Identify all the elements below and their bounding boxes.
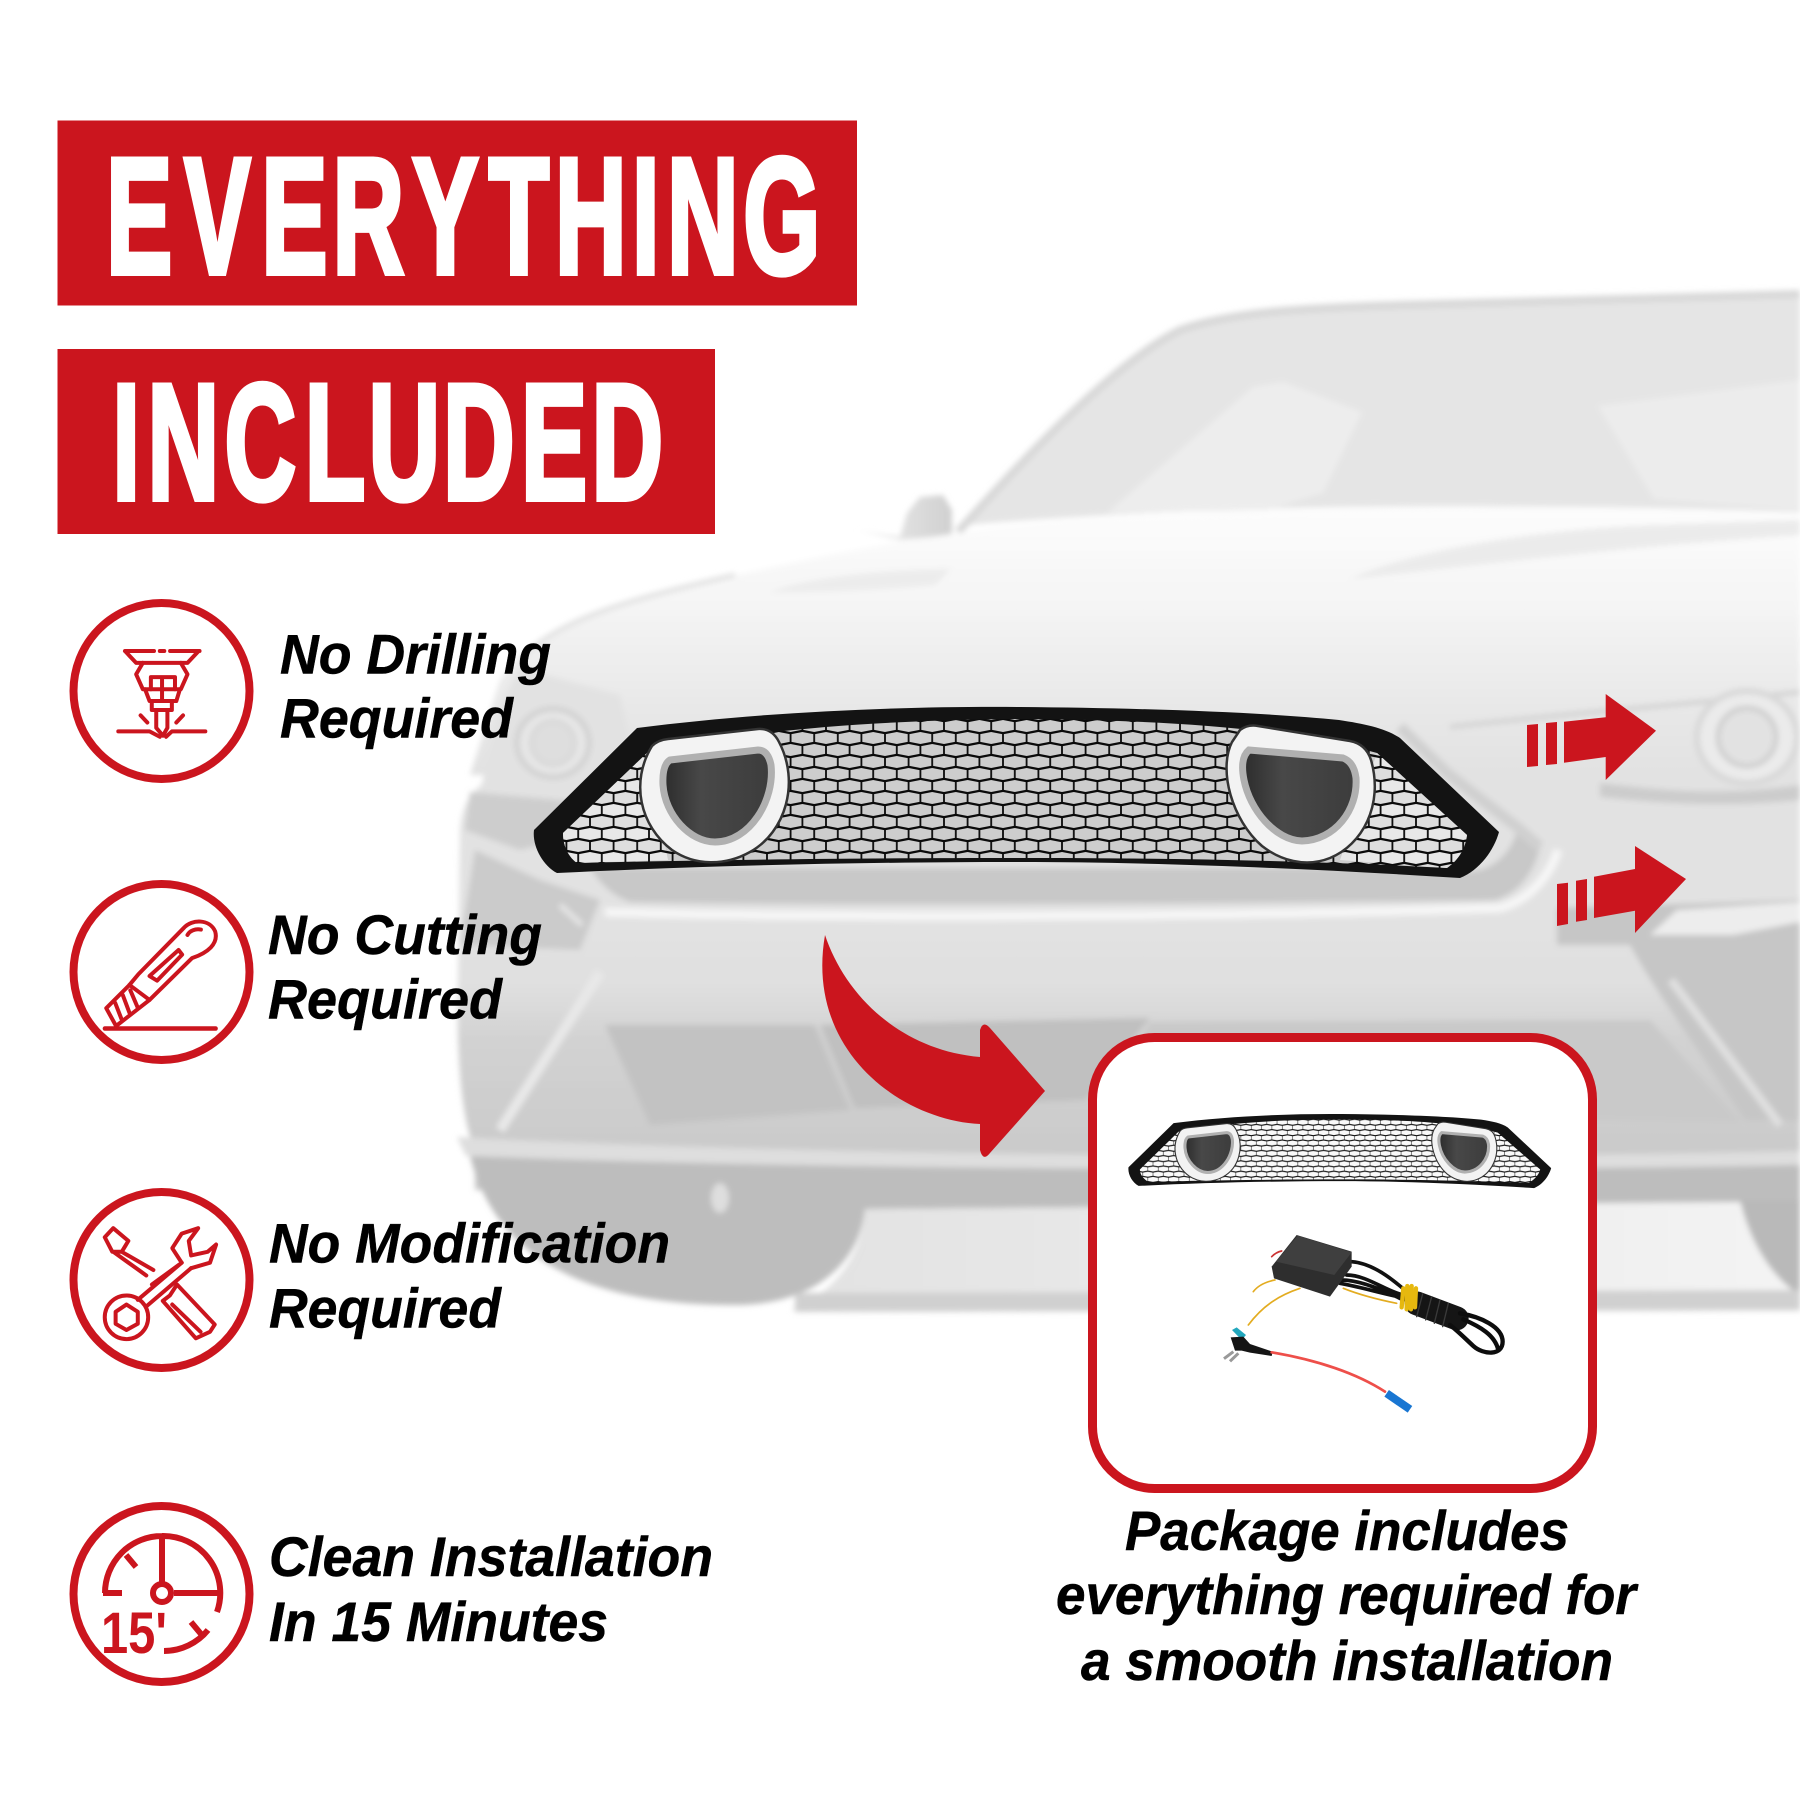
icon ring: tools [74,1192,250,1368]
hood [470,507,1800,775]
label: no cutting: No Cutting [268,903,542,966]
under-car floor [790,1202,1800,1312]
arrow: lower right [1557,846,1686,933]
icon: fifteen minute timer [101,1536,220,1666]
heading banner: INCLUDED: INCLUDED [112,350,663,534]
feature: no drilling [74,603,551,779]
panel: package contents [1092,1038,1592,1488]
background car photo [457,294,1800,1312]
icon ring: drilling [74,603,250,779]
lower valance and left wheel [470,1156,1800,1305]
package caption: everything required for [1056,1563,1639,1626]
lower intakes [605,1025,850,1125]
label: no modification: No Modification [269,1212,670,1274]
grille surround [590,830,1540,904]
curved arrow to package box [822,935,1045,1157]
icon ring: timer [74,1506,250,1682]
feature: no cutting [74,884,542,1060]
feature: no modification [74,1192,670,1368]
icon: wrench and screwdriver [105,1228,216,1339]
lower body [458,770,1800,1190]
wing mirror [856,495,952,540]
label: no drilling: Required [280,686,515,750]
icon ring: cutting [74,884,250,1060]
arrow: top right [1527,694,1656,780]
small grille product [1128,1114,1551,1188]
icon: drill [118,651,205,737]
windshield [965,295,1800,525]
label: no drilling: No Drilling [280,622,551,686]
icon: utility knife [105,922,216,1029]
heading banner: EVERYTHING: EVERYTHING [106,124,820,308]
icon: fifteen minute timer: 15' [101,1601,167,1666]
label: clean installation: Clean Installation [269,1525,713,1588]
package caption: Package includes [1125,1499,1569,1562]
bumper lip [457,1137,1800,1170]
wiring harness product [1224,1235,1503,1409]
right headlight [1450,692,1800,727]
package caption: a smooth installation [1081,1629,1613,1692]
main honeycomb grille [534,707,1499,878]
left headlight [480,668,640,800]
label: no modification: Required [269,1276,503,1340]
label: clean installation: In 15 Minutes [269,1590,608,1653]
feature: clean installation [74,1506,713,1682]
label: no cutting: Required [268,968,504,1030]
right fog lamp strip [1557,900,1800,945]
